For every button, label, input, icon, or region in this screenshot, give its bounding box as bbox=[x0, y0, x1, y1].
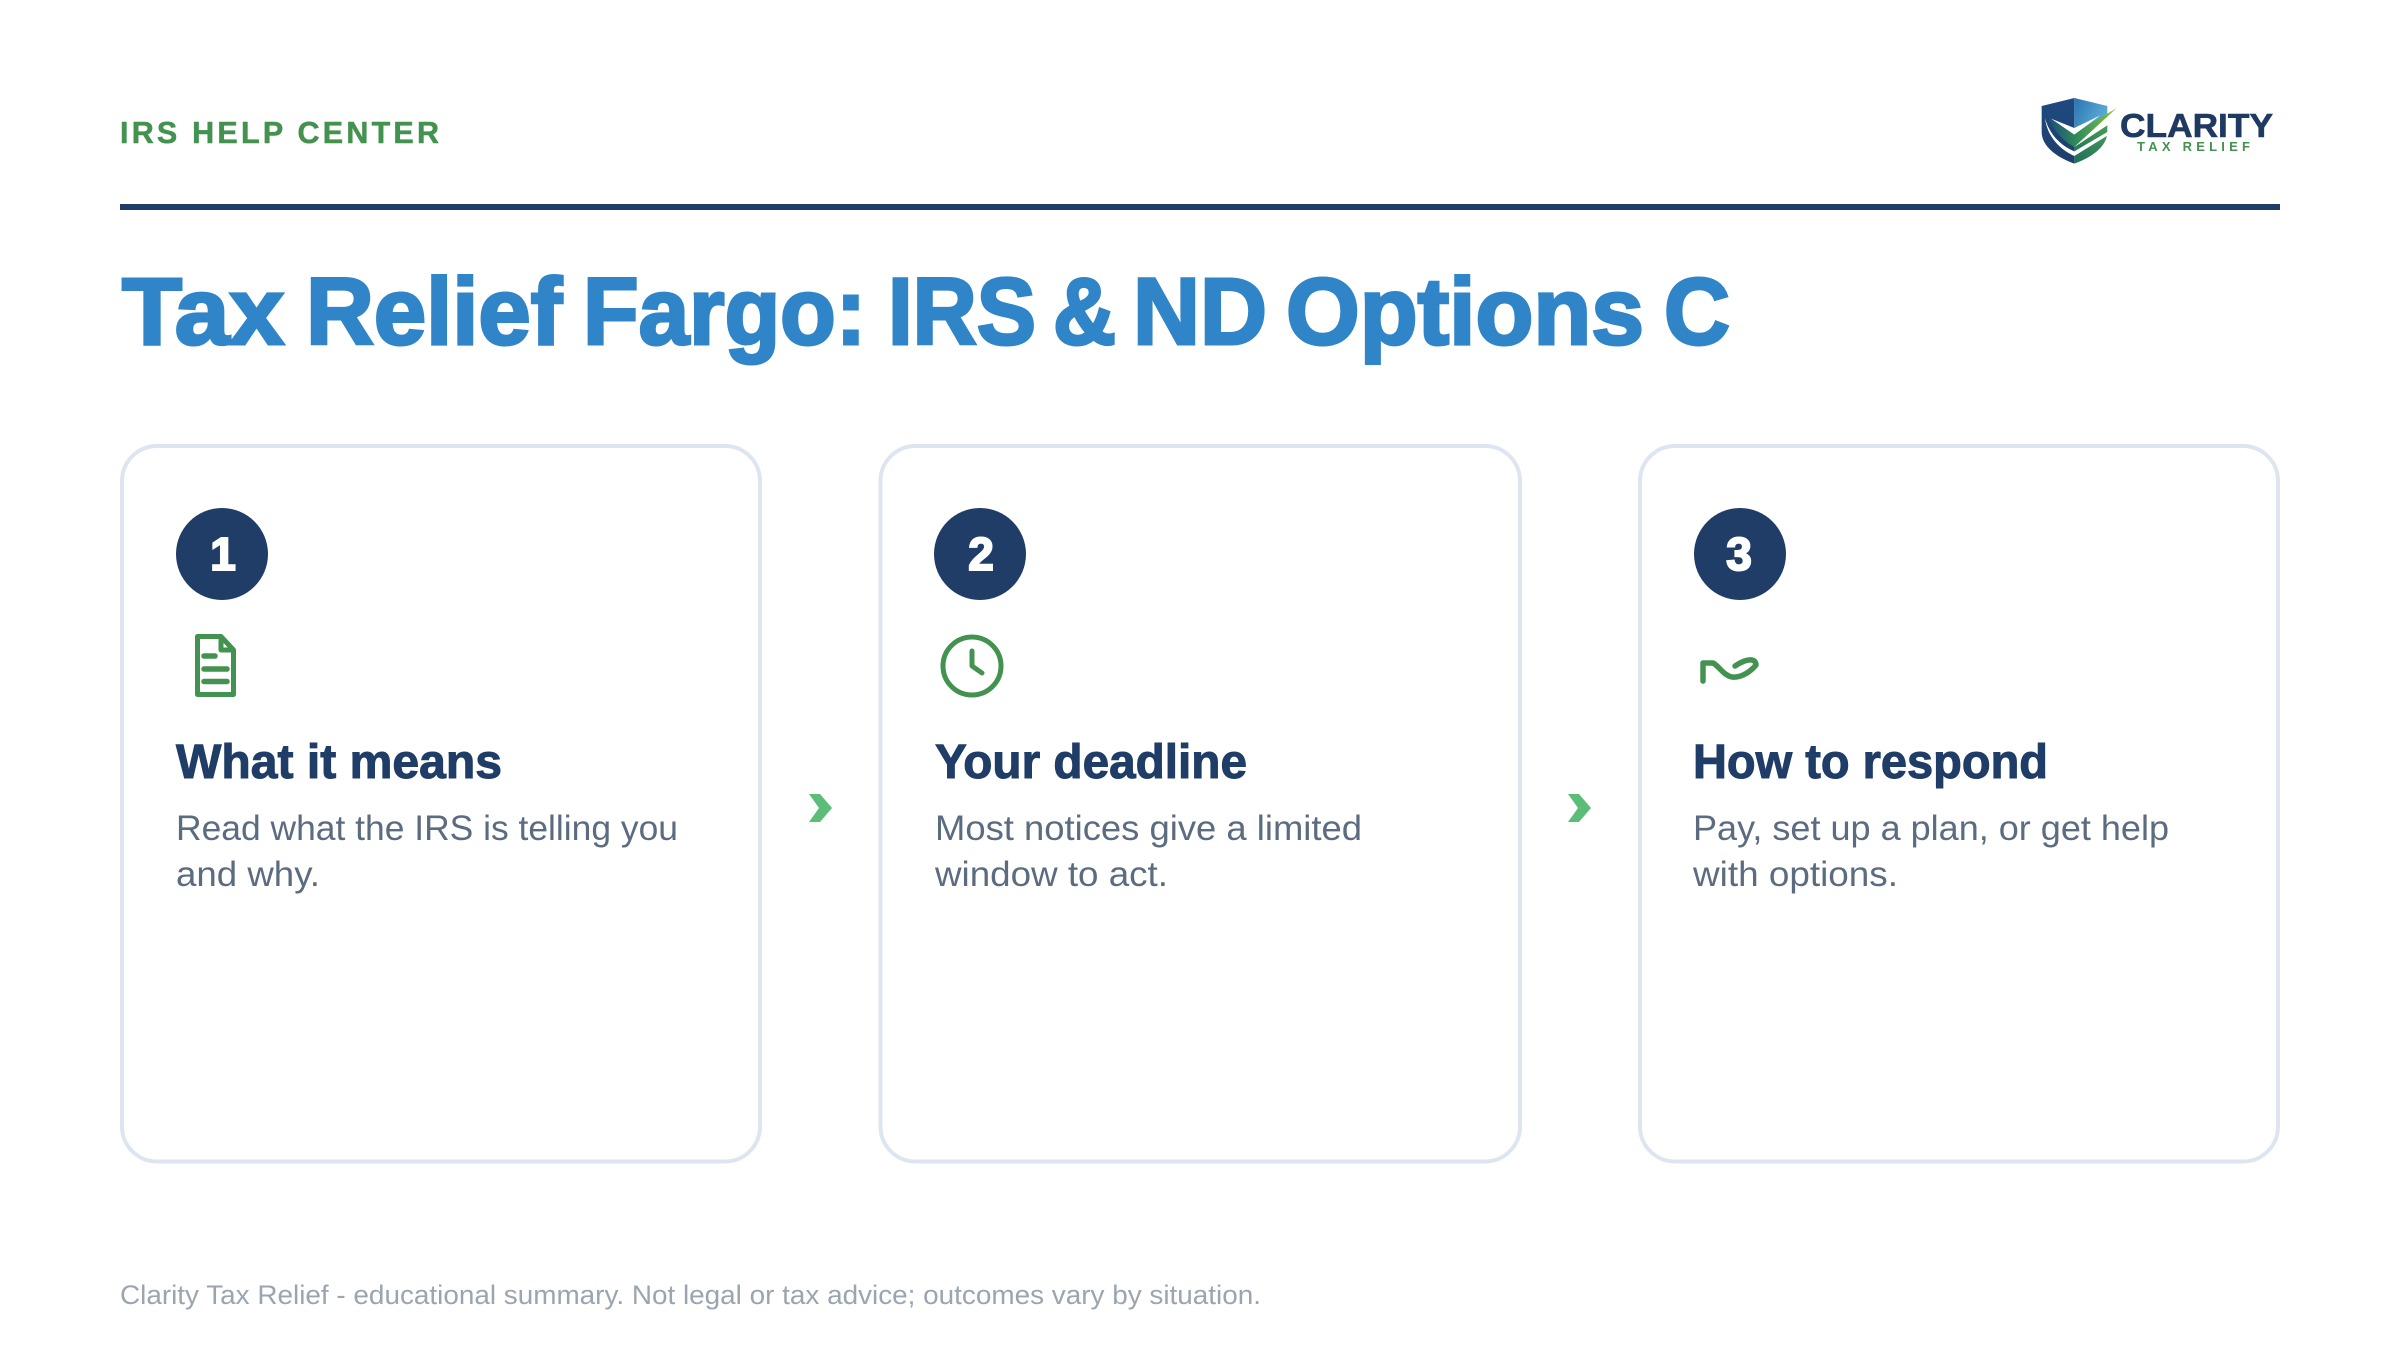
title: C bbox=[1664, 259, 1730, 365]
icon: document bbox=[198, 636, 234, 694]
title: Options bbox=[1286, 259, 1644, 365]
title: & bbox=[1053, 259, 1116, 365]
step number 1: 1 bbox=[210, 528, 236, 580]
description: Most notices give a limited bbox=[935, 809, 1362, 848]
icon: hand bbox=[1703, 660, 1756, 681]
tagline: TAX RELIEF bbox=[2137, 139, 2250, 154]
title: Relief bbox=[306, 259, 562, 365]
description: Pay, set up a plan, or get help bbox=[1693, 809, 2169, 848]
heading: How to respond bbox=[1693, 736, 2048, 789]
step number 1 bbox=[176, 508, 268, 600]
description bbox=[934, 809, 1362, 894]
heading: What it means bbox=[176, 736, 502, 789]
heading: Your deadline bbox=[935, 736, 1247, 789]
title bbox=[122, 259, 1730, 365]
arrow 2 bbox=[1568, 794, 1591, 822]
title: Tax bbox=[122, 259, 284, 365]
eyebrow label: IRS HELP CENTER bbox=[120, 116, 439, 150]
description: with options. bbox=[1692, 855, 1898, 894]
panel: your deadline bbox=[880, 446, 1520, 1162]
title: Fargo: bbox=[583, 259, 866, 365]
panel: what it means bbox=[122, 446, 760, 1162]
title: IRS bbox=[888, 259, 1036, 365]
description: Read what the IRS is telling you bbox=[176, 809, 678, 848]
description bbox=[176, 809, 678, 894]
step number 2 bbox=[934, 508, 1026, 600]
description: and why. bbox=[176, 855, 320, 894]
icon: shield with check bbox=[2042, 98, 2117, 164]
panel: how to respond bbox=[1640, 446, 2278, 1162]
step number 2: 2 bbox=[968, 528, 994, 580]
footer note: Clarity Tax Relief - educational summary. Not legal or tax advice; outcomes vary by situation. bbox=[120, 1280, 1261, 1310]
logo: Clarity Tax Relief bbox=[2042, 98, 2273, 164]
arrow 1 bbox=[809, 794, 832, 822]
step number 3: 3 bbox=[1726, 528, 1752, 580]
description bbox=[1692, 809, 2169, 894]
icon: clock bbox=[943, 637, 1001, 695]
wordmark: CLARITY bbox=[2120, 107, 2273, 144]
description: window to act. bbox=[934, 855, 1168, 894]
title: ND bbox=[1133, 259, 1267, 365]
step number 3 bbox=[1694, 508, 1786, 600]
